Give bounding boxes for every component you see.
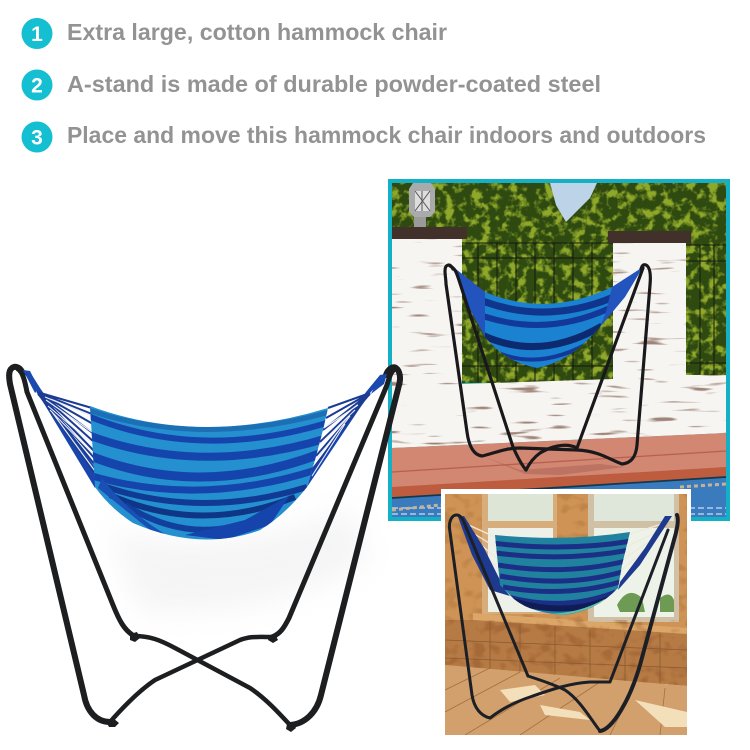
lamp post [409,183,435,227]
right window [588,494,679,622]
large hammock chair on stand [9,367,400,732]
indoor hammock stand [449,515,678,731]
indoor photo panel [441,489,691,740]
wood floor [445,665,687,735]
window sill [473,613,687,634]
hammock side bands [458,516,672,596]
number badge 2: 2 [31,74,43,98]
feature 2 [22,70,601,100]
foliage background [392,183,726,383]
patio hammock stand [445,265,650,470]
hammock side bands and ropes [452,266,643,337]
feature text 1: Extra large, cotton hammock chair [67,19,447,45]
left rope fan [23,371,101,488]
wall caps [392,227,691,243]
stand feet [106,632,296,732]
steel A-frame stand [9,367,400,725]
iron fence [462,243,726,382]
feature text 3: Place and move this hammock chair indoors and outdoors [67,122,706,148]
wood wall [445,494,687,684]
feature text 2: A-stand is made of durable powder-coated steel [67,71,601,97]
shingle wall [445,620,687,686]
left window [482,494,557,614]
hammock fabric [485,287,612,368]
number badge 1: 1 [31,23,43,46]
number badge 3: 3 [31,126,43,150]
feature 1 [22,18,447,49]
striped hammock fabric [90,406,328,540]
swimming pool edge [392,477,726,517]
hammock fabric [495,532,630,615]
number badge 2 [22,70,52,100]
floor shadow [110,510,370,611]
right rope fan [307,374,387,487]
hammock tip left [23,370,39,393]
white stone wall [392,239,726,449]
feature 3 [22,122,706,152]
hammock tip right [371,374,387,394]
stand shadow [485,457,625,475]
hammock ropes [462,522,668,584]
outdoor photo panel [388,179,730,521]
number badge 1 [22,18,52,49]
wooden deck [392,433,726,498]
number badge 3 [22,122,52,152]
